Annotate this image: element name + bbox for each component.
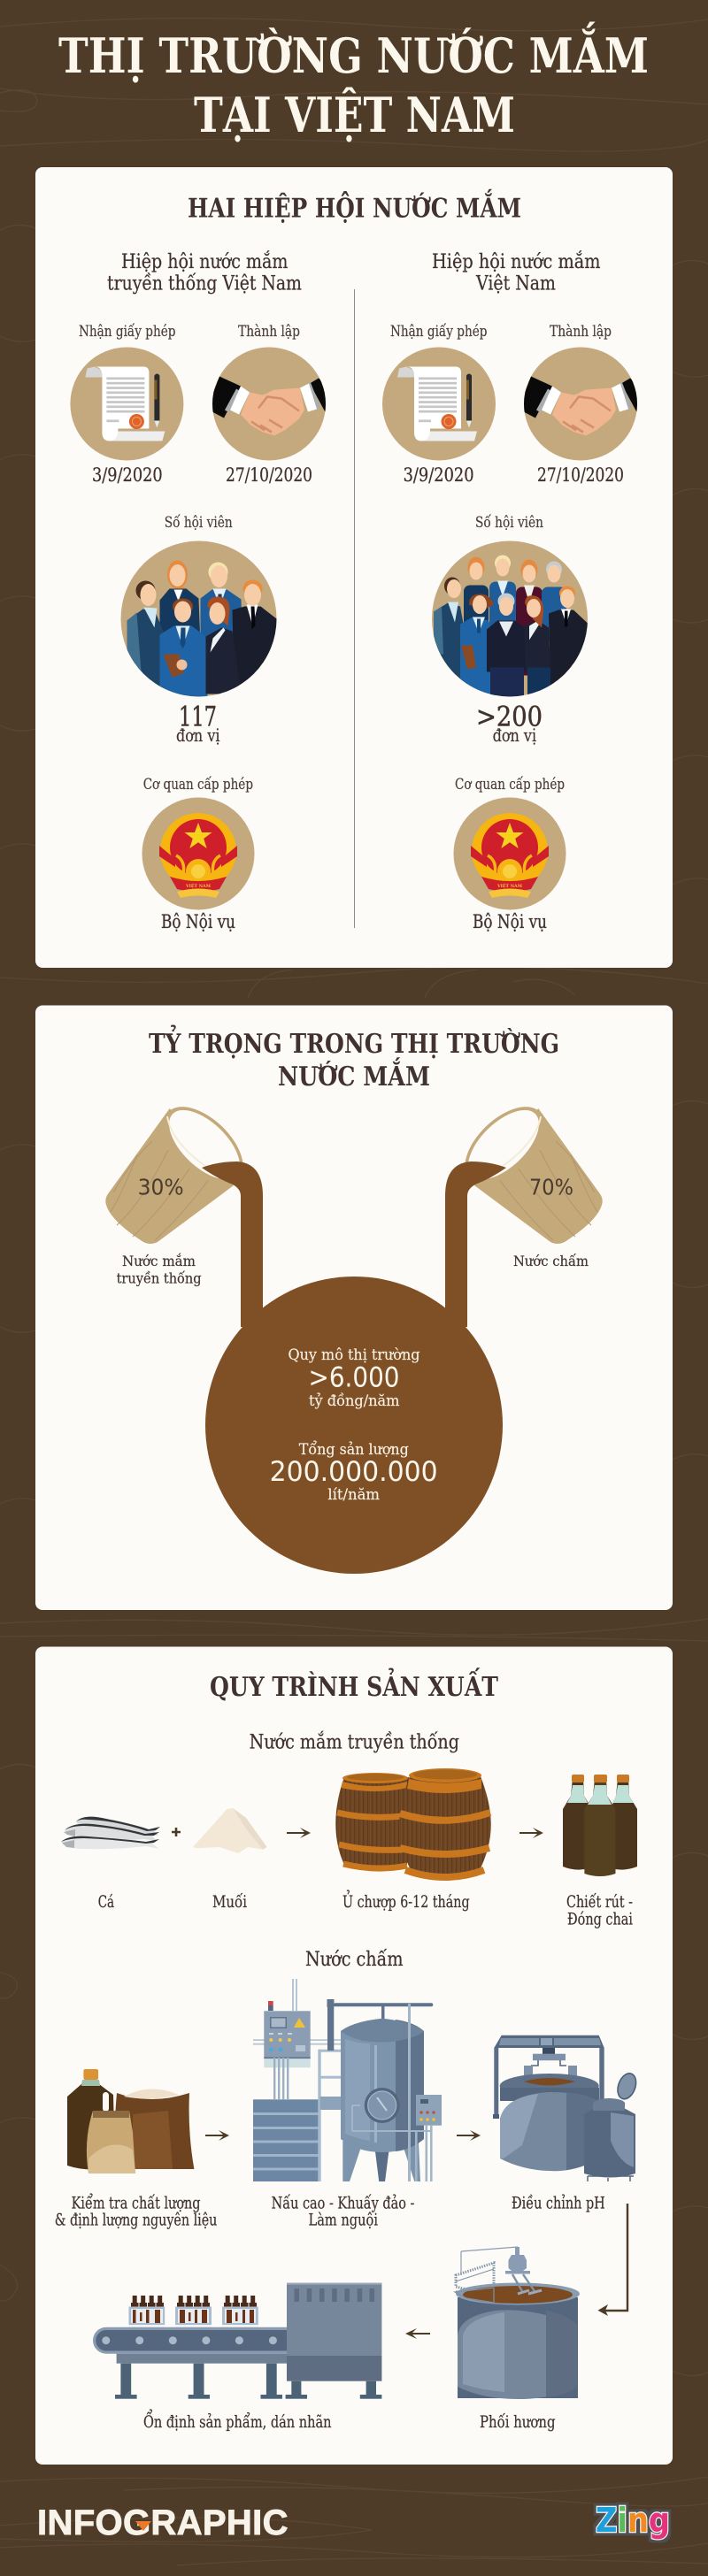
icon: licence document left <box>70 347 183 460</box>
icon: national emblem left: VIỆT NAM <box>185 882 211 889</box>
value: ministry right: Bộ Nội vụ <box>473 911 547 932</box>
date: licence right: 3/9/2020 <box>404 464 474 486</box>
right association name: Hiệp hội nước mắm <box>432 250 600 273</box>
left association name: truyền thống Việt Nam <box>107 272 302 295</box>
label: cooking: Làm nguội <box>308 2212 378 2230</box>
label: salt: Muối <box>212 1893 247 1912</box>
text block: market size: tỷ đồng/năm <box>309 1392 400 1410</box>
icon: handshake left <box>211 347 327 460</box>
label: traditional fish sauce: truyền thống <box>117 1270 202 1287</box>
label: quality check <box>55 2194 217 2230</box>
text block: total output: 200.000.000 <box>270 1456 438 1488</box>
icon: salt <box>193 1808 267 1853</box>
date: founded left: 27/10/2020 <box>226 464 312 486</box>
icon: left cup pouring <box>105 1092 257 1244</box>
label: bottling: Chiết rút - <box>566 1893 633 1912</box>
label: founded left: Thành lập <box>238 323 300 341</box>
arrowhead <box>598 2304 608 2316</box>
icon: handshake right <box>522 347 639 460</box>
label: licence left: Nhận giấy phép <box>79 323 176 341</box>
date: licence left: 3/9/2020 <box>92 464 163 486</box>
big circle: market totals <box>205 1276 503 1574</box>
icon: pH adjustment tank <box>493 2036 639 2181</box>
icon: right cup pouring <box>451 1092 603 1244</box>
text block: total output <box>270 1441 438 1504</box>
text block: market size <box>289 1346 420 1410</box>
icon: licence document right <box>382 347 496 460</box>
text block: market size: Quy mô thị trường <box>289 1346 420 1364</box>
date: founded right: 27/10/2020 <box>537 464 624 486</box>
panel: production process <box>35 1647 673 2465</box>
arrow <box>287 1828 311 1838</box>
label: fish: Cá <box>98 1893 114 1912</box>
label: licensing body right: Cơ quan cấp phép <box>455 776 565 794</box>
column divider <box>354 289 355 928</box>
arrow <box>519 1828 543 1838</box>
footer: infographic wordmark: INFOGRAPHIC <box>37 2503 289 2542</box>
label: pH adjustment: Điều chỉnh pH <box>512 2195 605 2213</box>
label: cooking <box>272 2195 414 2230</box>
label: flavouring: Phối hương <box>480 2413 556 2432</box>
icon: national emblem left <box>142 798 255 909</box>
label: members right: Số hội viên <box>475 514 543 532</box>
value: 30 percent: 30% <box>138 1175 184 1200</box>
label: licensing body left: Cơ quan cấp phép <box>143 776 253 794</box>
plus sign <box>172 1828 181 1836</box>
panel: two associations <box>35 167 673 968</box>
label: traditional fish sauce <box>117 1253 202 1287</box>
arrow <box>457 2130 481 2141</box>
value: over 200 members <box>476 702 543 746</box>
icon: conveyor with bottling machine <box>93 2283 381 2399</box>
label: fermentation: Ủ chượp 6-12 tháng <box>342 1890 470 1912</box>
subheading: dipping sauce: Nước chấm <box>305 1948 404 1971</box>
stream: left <box>202 1162 263 1327</box>
value: over 200 members: đơn vị <box>493 724 536 746</box>
icon: national emblem right: VIỆT NAM <box>496 882 522 889</box>
label: founded right: Thành lập <box>550 323 612 341</box>
label: licence right: Nhận giấy phép <box>390 323 488 341</box>
left association name <box>107 250 302 295</box>
value: 117 members <box>176 702 219 746</box>
label: bottling <box>566 1893 633 1929</box>
arrow <box>405 2328 430 2339</box>
right association name: Việt Nam <box>475 272 556 295</box>
icon: flavour mixing tank <box>455 2247 580 2399</box>
stream: right <box>445 1162 506 1327</box>
label: quality check: Kiểm tra chất lượng <box>72 2194 201 2213</box>
heading: market share: NƯỚC MẮM <box>278 1057 430 1092</box>
right association name <box>432 250 600 295</box>
label: labelling: Ổn định sản phẩm, dán nhãn <box>143 2409 332 2432</box>
value: 117 members: đơn vị <box>176 724 219 746</box>
value: ministry left: Bộ Nội vụ <box>161 911 235 932</box>
value: 117 members: 117 <box>179 702 217 733</box>
icon: cooking machine <box>253 1979 442 2181</box>
heading: market share <box>149 1024 559 1092</box>
icon: bottles <box>563 1775 637 1876</box>
icon: six members <box>120 541 276 697</box>
value: over 200 members: >200 <box>476 702 543 733</box>
label: bottling: Đóng chai <box>567 1911 633 1929</box>
icon: nine members <box>432 541 588 699</box>
text block: total output: Tổng sản lượng <box>299 1441 409 1459</box>
label: traditional fish sauce: Nước mắm <box>122 1253 196 1269</box>
text block: total output: lít/năm <box>327 1486 380 1504</box>
label: quality check: & định lượng nguyên liệu <box>55 2212 217 2230</box>
heading: market share: TỶ TRỌNG TRONG THỊ TRƯỜNG <box>149 1024 559 1059</box>
icon: fish <box>61 1817 160 1849</box>
label: members left: Số hội viên <box>165 514 233 532</box>
title: TẠI VIỆT NAM <box>194 87 515 143</box>
footer: Zing logo: Zing <box>596 2501 670 2540</box>
label: cooking: Nấu cao - Khuấy đảo - <box>272 2195 414 2213</box>
panel: market share <box>35 1005 673 1610</box>
title <box>58 21 649 143</box>
icon: national emblem right <box>453 798 566 909</box>
subheading: traditional: Nước mắm truyền thống <box>250 1730 459 1753</box>
heading: production process: QUY TRÌNH SẢN XUẤT <box>210 1668 498 1702</box>
elbow arrow <box>604 2204 627 2311</box>
left association name: Hiệp hội nước mắm <box>121 250 289 273</box>
value: 70 percent: 70% <box>529 1175 573 1200</box>
arrow <box>205 2130 229 2141</box>
text block: market size: >6.000 <box>308 1362 400 1394</box>
icon: barrels <box>335 1768 491 1880</box>
label: dipping sauce: Nước chấm <box>513 1253 589 1269</box>
icon: ingredients <box>67 2069 194 2174</box>
heading: two associations: HAI HIỆP HỘI NƯỚC MẮM <box>188 189 521 224</box>
